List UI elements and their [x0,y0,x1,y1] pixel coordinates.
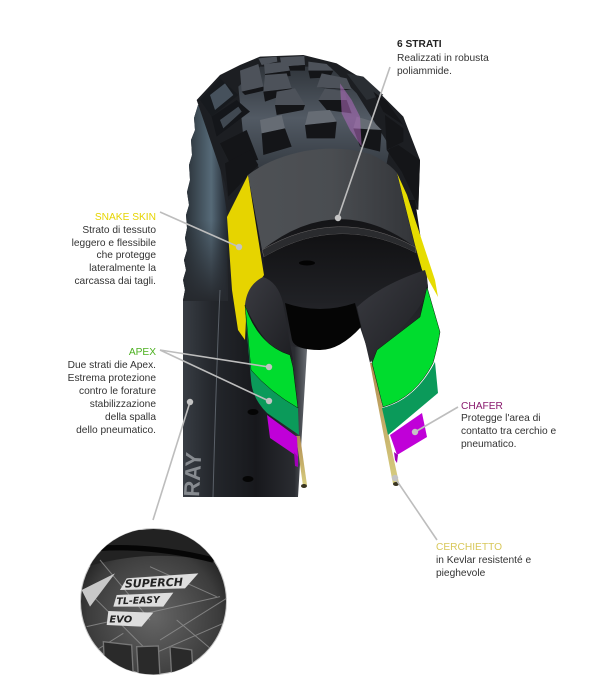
chafer left [267,415,298,467]
leader: cerchietto [392,475,437,540]
text: cerchietto [436,542,531,579]
interior details [264,234,428,350]
text: snake skin: lateralmente la [89,263,156,274]
lens lugs [103,642,193,677]
text: chafer: Protegge l'area di [461,413,541,424]
text: apex: Estrema protezione [68,373,156,384]
text: snake skin [72,212,156,287]
lens labels: EVO [109,615,133,626]
leader: detail lens [153,399,193,520]
six ply carcass [248,149,416,257]
text: chafer [461,401,556,450]
bead wire left [296,436,307,488]
purple sheen [340,83,362,147]
text: apex: Due strati die Apex. [68,360,156,371]
apex dark left [245,310,299,435]
ply edge [262,227,416,257]
text: snake skin: leggero e flessibile [72,238,156,249]
chafer right [390,413,427,463]
tyre interior [245,200,428,363]
tread [197,55,420,210]
text: snake skin: carcassa dai tagli. [74,276,156,287]
text: chafer: pneumatico. [461,439,516,450]
text: chafer: CHAFER [461,401,503,412]
leader: chafer [412,407,458,435]
text: apex: stabilizzazione [90,399,156,410]
right flap [357,270,428,363]
bead wire right [370,363,399,486]
text: 6 strati: 6 STRATI [397,39,442,50]
black inner tongue [285,303,361,350]
rear tyre sidewall [179,95,307,500]
text: apex: della spalla [105,412,156,423]
layer: snake skin left [227,175,264,340]
layer: snake skin right [397,173,438,297]
text: apex [68,347,156,436]
apex bright right [372,287,440,407]
left flap [245,277,293,360]
apex bright left [245,305,298,408]
upper sidewall texture [184,105,228,294]
lens labels [107,573,198,627]
tread lugs [200,56,420,207]
lens mesh lines [87,560,227,657]
rim line [213,290,220,497]
sidewall lettering: RAY [179,451,206,497]
text: cerchietto: pieghevole [436,568,486,579]
valve holes [242,409,258,482]
text: snake skin: Strato di tessuto [82,225,156,236]
text: apex: APEX [129,347,156,358]
infographic canvas [68,40,556,675]
detail lens [80,528,227,677]
text: 6 strati [397,39,489,77]
apex dark right [382,362,438,435]
text: apex: dello pneumatico. [76,425,156,436]
text: 6 strati: poliammide. [397,66,452,77]
text: apex: contro le forature [79,386,156,397]
text: snake skin: che protegge [97,250,156,261]
lens labels: TL-EASY [116,595,161,607]
text: 6 strati: Realizzati in robusta [397,53,489,64]
leader: 6 strati [335,67,390,221]
text: cerchietto: CERCHIETTO [436,542,502,553]
sidewall fade [183,229,226,301]
leader: snake skin [160,212,242,250]
lens triangle [82,573,115,607]
lens labels: SUPERCH [125,576,183,591]
text: snake skin: SNAKE SKIN [95,212,156,223]
leader: apex [160,350,272,404]
text: chafer: contatto tra cerchio e [461,426,556,437]
text: cerchietto: in Kevlar resistenté e [436,555,531,566]
